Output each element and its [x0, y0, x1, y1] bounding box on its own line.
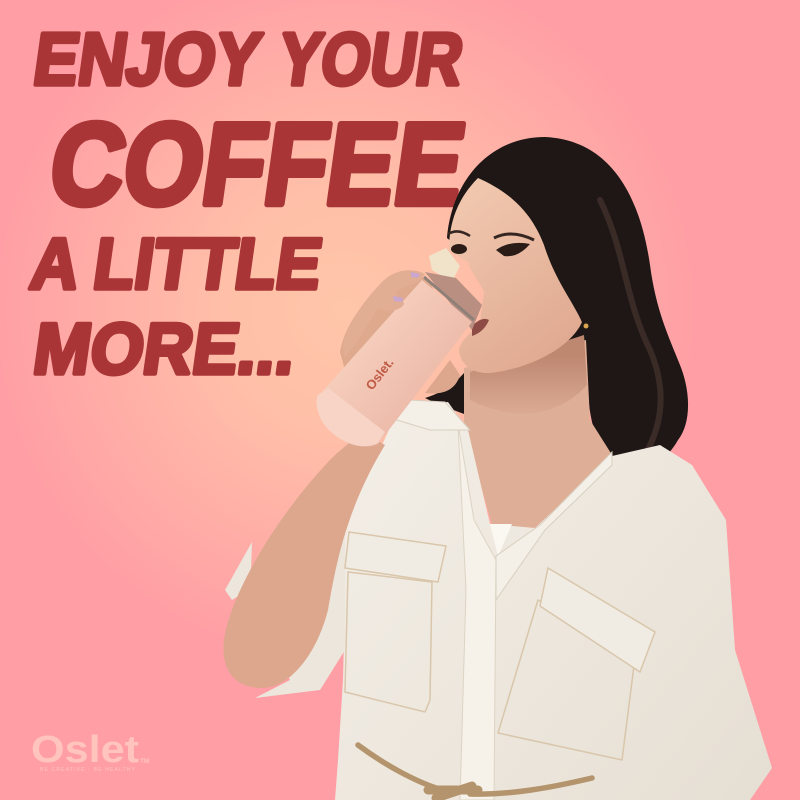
headline	[26, 18, 473, 389]
woman drinking from bottle	[223, 137, 772, 800]
fingers	[343, 270, 425, 358]
pocket right	[498, 568, 655, 760]
waist rope	[358, 745, 592, 798]
pocket left	[345, 532, 446, 712]
eye left	[451, 244, 467, 254]
bottle logo: Oslet.	[363, 355, 397, 393]
earring	[584, 324, 588, 328]
neck and chest	[464, 340, 614, 528]
bottle lid	[425, 272, 482, 330]
headline word: coffee: COFFEE	[43, 99, 473, 229]
hair highlights	[600, 200, 661, 455]
headline word: your: YOUR	[274, 18, 468, 100]
inner top	[490, 524, 512, 556]
logo tagline: BE CREATIVE · BE HEALTHY	[40, 767, 136, 773]
eyebrow left	[448, 231, 470, 236]
bottle body	[318, 280, 472, 446]
shirt placket	[458, 424, 496, 800]
eyebrow right	[494, 234, 534, 240]
logo	[31, 729, 149, 773]
eye right	[496, 243, 530, 256]
jaw shadow	[470, 335, 587, 414]
collar right	[496, 452, 612, 600]
eyes and brows	[448, 231, 534, 256]
collar left	[390, 400, 470, 430]
bottle rim	[424, 277, 474, 320]
lower left hair	[425, 365, 500, 420]
face	[449, 178, 582, 373]
logo wordmark: Oslet	[31, 729, 139, 771]
hair front strand	[478, 165, 597, 335]
trademark: TM	[140, 758, 149, 765]
arm	[223, 432, 385, 688]
shirt left sleeve	[225, 530, 345, 698]
bottle base	[316, 388, 385, 446]
headline word: little: LITTLE	[89, 225, 327, 304]
rope knot	[428, 786, 478, 798]
hand behind bottle	[340, 272, 440, 395]
shirt body	[335, 402, 772, 800]
hair back	[447, 137, 688, 470]
headline word: more: MORE...	[29, 310, 301, 389]
pocket flap right	[540, 568, 655, 672]
bottle spout	[429, 248, 460, 282]
headline word: a: A	[26, 225, 85, 304]
headline word: enjoy: ENJOY	[29, 18, 266, 100]
lips	[472, 319, 489, 336]
nails	[393, 272, 420, 302]
bottle	[316, 248, 482, 446]
thumb	[425, 360, 460, 394]
pocket flap left	[345, 532, 446, 582]
